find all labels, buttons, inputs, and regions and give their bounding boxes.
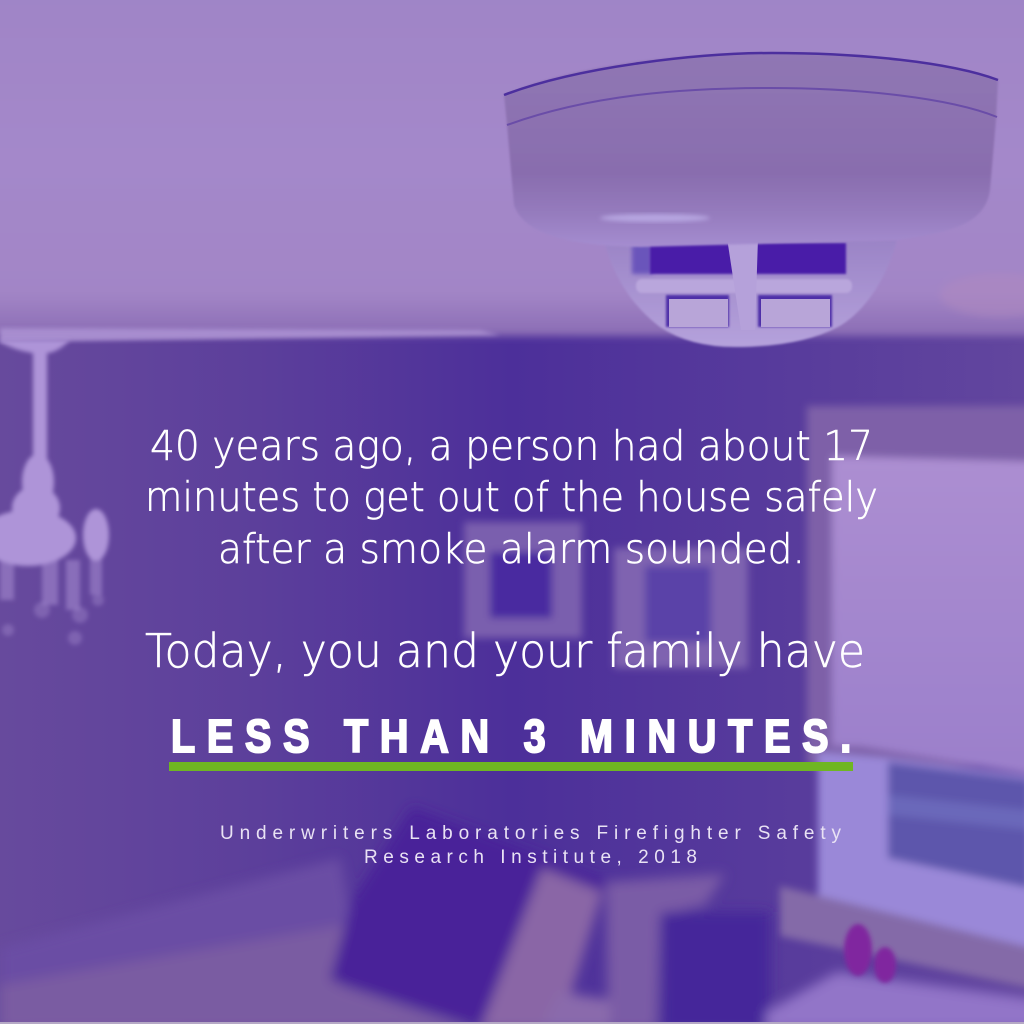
alarm sensor head: [604, 238, 897, 347]
citation line 2: Research Institute, 2018: [364, 847, 697, 868]
green underline: [169, 762, 853, 771]
first paragraph line 3: after a smoke alarm sounded.: [218, 525, 805, 573]
ceiling moulding: [0, 328, 500, 342]
picture frames: [464, 522, 748, 668]
sofa, cushions and side table: [0, 807, 1024, 1024]
smoke alarm: [504, 53, 998, 347]
main text block: [145, 422, 878, 678]
source citation: [220, 823, 842, 868]
first paragraph line 1: 40 years ago, a person had about 17: [150, 422, 873, 470]
emphasis headline: LESS THAN 3 MINUTES.: [171, 711, 851, 763]
ceiling: [0, 0, 1024, 336]
bottom edge: [0, 1022, 1024, 1024]
first paragraph line 2: minutes to get out of the house safely: [145, 473, 878, 521]
window frame and blind: [780, 406, 1024, 990]
citation line 1: Underwriters Laboratories Firefighter Safety: [220, 823, 842, 844]
flowers: [844, 924, 896, 983]
chandelier: [0, 340, 109, 645]
second paragraph: Today, you and your family have: [145, 624, 865, 678]
alarm main body: [504, 53, 998, 247]
